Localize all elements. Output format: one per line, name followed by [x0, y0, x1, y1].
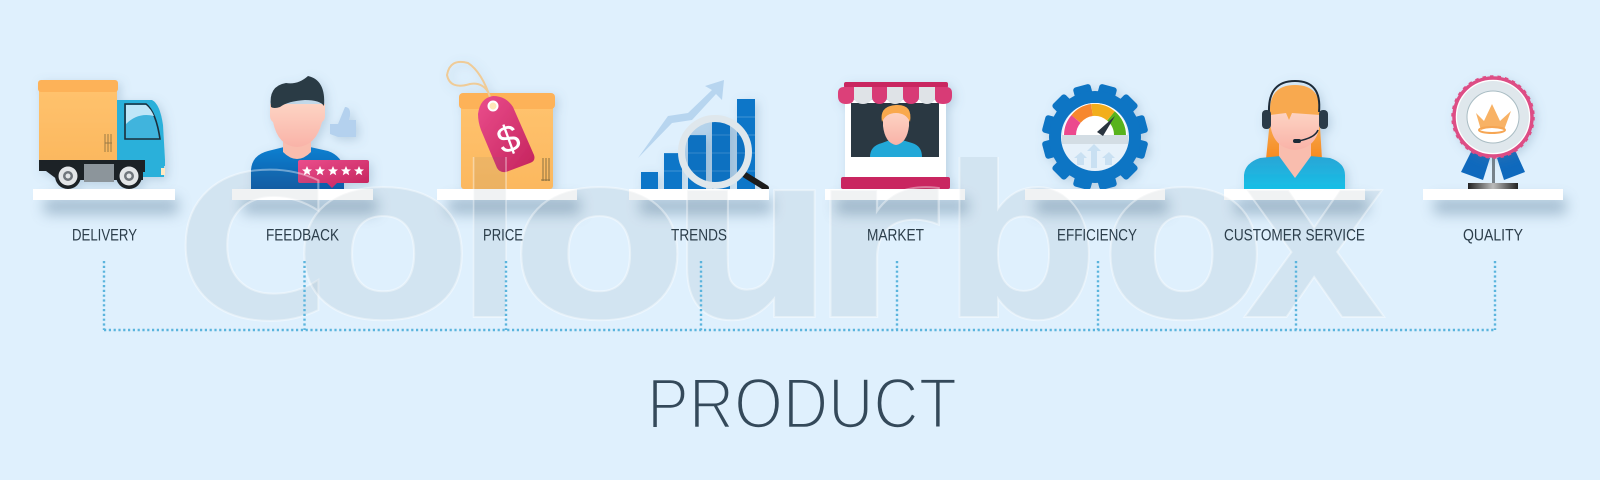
- box body: [461, 105, 553, 189]
- ribbons: [1461, 150, 1525, 180]
- efficiency arrows: [1074, 144, 1115, 168]
- awning top: [844, 82, 948, 88]
- icon: market stall: [838, 82, 952, 189]
- face: [1270, 112, 1320, 150]
- watermark: [184, 157, 1386, 322]
- hair fringe: [1270, 85, 1320, 120]
- label: market: MARKET: [867, 226, 924, 244]
- stand base: [1468, 183, 1518, 189]
- medal ring: [1457, 81, 1529, 153]
- label: efficiency: EFFICIENCY: [1057, 226, 1137, 244]
- ear cups: [1262, 110, 1328, 129]
- front wheel: [55, 163, 81, 189]
- truck cab: [117, 100, 165, 166]
- dotted connector: [104, 261, 1495, 330]
- bar chart: [641, 99, 755, 189]
- neck: [1279, 140, 1311, 178]
- vendor face: [883, 112, 909, 145]
- shelves: [33, 189, 1563, 200]
- awning scallops: [838, 87, 952, 104]
- stand pole: [1492, 155, 1495, 184]
- label: customer service: CUSTOMER SERVICE: [1224, 226, 1365, 244]
- icon: customer service agent: [1244, 81, 1345, 189]
- gear inner plate: [1061, 103, 1129, 171]
- crown: [1476, 104, 1511, 133]
- gauge segments: [1070, 110, 1120, 135]
- box barcode: [105, 134, 112, 152]
- icon: trends chart: [638, 80, 766, 189]
- magnifier handle: [745, 175, 766, 188]
- truck window: [125, 104, 160, 139]
- truck cargo box: [39, 90, 117, 160]
- vendor hair: [882, 105, 910, 122]
- shirt: [251, 147, 344, 189]
- microphone: [1293, 130, 1318, 143]
- headset band: [1269, 81, 1319, 112]
- watermark: u: [669, 102, 834, 372]
- rating stars: [302, 166, 364, 175]
- fuel tank: [84, 164, 114, 182]
- vendor shirt: [870, 140, 922, 157]
- gauge white face: [1063, 103, 1127, 135]
- window glare: [126, 105, 154, 124]
- watermark: o: [293, 102, 473, 372]
- rating badge: [298, 160, 369, 188]
- title: PRODUCT: [647, 365, 957, 444]
- gear teeth: [1041, 83, 1149, 191]
- box lid: [459, 93, 555, 109]
- blouse: [1244, 156, 1345, 189]
- watermark: b: [941, 103, 1099, 372]
- stall counter: [841, 177, 950, 189]
- face: [270, 104, 325, 147]
- gauge needle: [1097, 116, 1115, 136]
- tag string: [447, 62, 491, 100]
- watermark: x: [1241, 103, 1388, 373]
- watermark: r: [808, 102, 940, 372]
- neck: [283, 135, 311, 159]
- rear wheel: [116, 163, 142, 189]
- label: trends: TRENDS: [671, 226, 727, 244]
- label: feedback: FEEDBACK: [266, 226, 339, 244]
- price tag: [478, 96, 534, 172]
- truck bumper: [140, 165, 164, 177]
- trend arrow: [638, 80, 724, 158]
- icon: delivery truck: [38, 80, 165, 189]
- box barcode: [541, 158, 550, 181]
- tag hole: [488, 102, 498, 110]
- long hair: [1266, 110, 1322, 159]
- thumbs up: [330, 107, 356, 137]
- label: quality: QUALITY: [1463, 226, 1523, 244]
- bar grid lines: [664, 117, 755, 171]
- dollar sign: $: [492, 117, 526, 163]
- label: price: PRICE: [483, 226, 523, 244]
- icon: feedback person: [251, 76, 369, 189]
- label: delivery: DELIVERY: [72, 226, 137, 244]
- icon: price box and tag: [447, 62, 555, 189]
- truck headlight: [161, 168, 165, 175]
- watermark: C: [175, 133, 332, 365]
- icon: quality rosette: [1452, 76, 1534, 189]
- watermark: o: [1100, 102, 1267, 373]
- stall wall: [845, 100, 946, 178]
- hair: [271, 76, 324, 108]
- truck chassis: [39, 160, 145, 180]
- shelf shadows: [44, 198, 1566, 214]
- magnifier lens: [682, 118, 748, 186]
- scalloped edge: [1454, 78, 1532, 156]
- truck box lid: [38, 80, 118, 92]
- medal centre: [1467, 91, 1519, 143]
- watermark: l: [458, 102, 522, 372]
- gauge band: [1062, 135, 1128, 144]
- stall window: [851, 103, 939, 157]
- watermark: o: [510, 102, 689, 373]
- icon: efficiency gear and gauge: [1041, 83, 1149, 191]
- gear body: [1049, 91, 1141, 183]
